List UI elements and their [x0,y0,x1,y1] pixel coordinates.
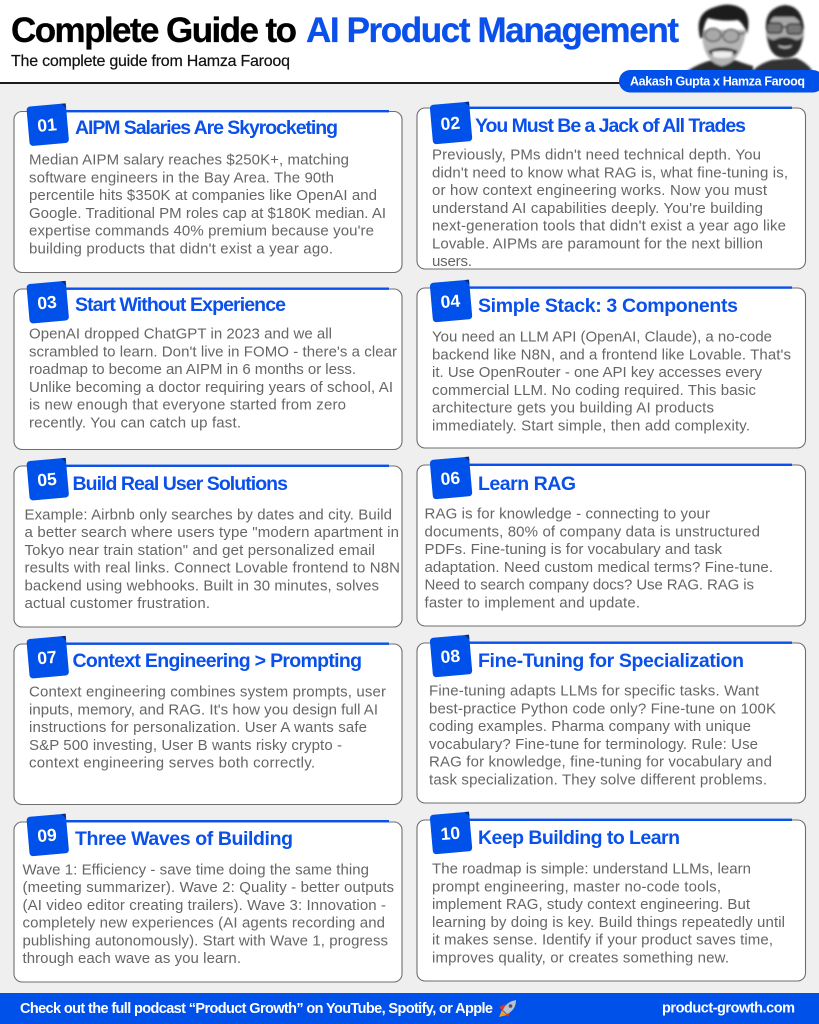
body 04: You need an LLM API (OpenAI, Claude), a no-code [432,329,772,346]
body 02: understand AI capabilities deeply. You're building [432,200,763,217]
panel: 10 Keep Building [417,812,806,981]
body 04: commercial LLM. No coding required. This basic [432,382,756,399]
heading 04: Simple Stack: 3 Components [478,295,738,317]
badge 02 [430,102,472,144]
body 08: task specialization. They solve different problems. [429,772,767,788]
body 06: PDFs. Fine-tuning is for vocabulary and task [424,541,722,558]
badge 01: 01 [36,114,58,136]
body 01: building products that didn't exist a year ago. [29,240,333,258]
badge 04 [430,280,472,322]
badge 05: 05 [36,469,58,490]
badge 06 [430,457,472,499]
heading 05: Build Real User Solutions [72,473,288,495]
body 01: Median AIPM salary reaches $250K+, matching [29,152,349,169]
heading 06: Learn RAG [478,473,576,495]
badge 06: 06 [440,468,461,489]
body 03: roadmap to become an AIPM in 6 months or less. [29,361,356,378]
body 05: Example: Airbnb only searches by dates and city. Build [24,506,392,524]
badge 04: 04 [440,291,461,312]
badge 01 [26,103,69,146]
heading 08: Fine-Tuning for Specialization [478,650,744,672]
body 06: adaptation. Need custom medical terms? Fine-tune. [424,559,773,576]
heading 09: Three Waves of Building [75,828,293,850]
body 01 [29,152,386,258]
body 02: didn't need to know what RAG is, what fine-tuning is, [432,164,788,182]
body 05: results with real links. Connect Lovable frontend to N8N [24,560,400,577]
body 05 [24,506,400,612]
badge 03 [26,281,69,324]
body 03: scrambled to learn. Don't live in FOMO - there's a clear [29,344,397,360]
heading 02: You Must Be a Jack of All Trades [475,115,746,137]
portraits of the two authors [687,5,812,72]
body 09 [22,862,394,967]
footer call to action: Check out the full podcast “Product Growth” on YouTube, Spotify, or Apple [20,1001,493,1017]
body 08: RAG for knowledge, fine-tuning for vocabulary and [429,754,772,771]
heading 07: Context Engineering > Prompting [72,650,362,672]
footer bar [0,993,819,1024]
body 03 [29,326,397,432]
body 05: actual customer frustration. [24,595,210,612]
header divider [0,82,625,84]
badge 08 [430,635,472,677]
body 03: OpenAI dropped ChatGPT in 2023 and we all [29,326,332,343]
name pill [619,70,819,92]
body 08: coding examples. Pharma company with unique [429,718,751,735]
body 06: faster to implement and update. [424,594,640,612]
body 09: publishing autonomously). Start with Wave 1, progress [22,932,388,950]
heading 01: AIPM Salaries Are Skyrocketing [75,117,338,139]
body 06: Need to search company docs? Use RAG. RAG is [424,577,754,594]
body 08: vocabulary? Fine-tune for terminology. Rule: Use [429,736,758,753]
title: AI Product Management [306,11,679,50]
body 05: Tokyo near train station" and get personalized email [24,542,375,559]
badge 07: 07 [36,647,58,668]
body 09: through each wave as you learn. [22,950,241,967]
body 02: or how context engineering works. Now you must [432,182,768,199]
body 05: a better search where users type "modern apartment in [24,524,399,541]
body 05: backend using webhooks. Built in 30 minutes, solves [24,578,379,594]
panel: 07 Context Engineering [14,636,402,804]
body 01: software engineers in the Bay Area. The 90th [29,170,334,186]
body 03: Unlike becoming a doctor requiring years of school, AI [29,379,393,396]
body 10: learning by doing is key. Build things repeatedly until [432,914,785,931]
body 02: Lovable. AIPMs are paramount for the next billion [432,236,763,252]
badge 09: 09 [36,825,58,846]
badge 05 [26,458,69,501]
body 06: RAG is for knowledge - connecting to your [424,506,710,523]
panel: 08 Fine-Tuning [417,635,806,803]
body 07: context engineering serves both correctly. [29,755,315,772]
body 08 [429,683,776,788]
icon: rocket [499,1000,516,1017]
body 07: inputs, memory, and RAG. It's how you design full AI [29,702,378,718]
body 10: The roadmap is simple: understand LLMs, learn [432,861,751,878]
body 04: architecture gets you building AI products [432,400,714,417]
header [0,0,819,92]
body 04 [432,329,791,434]
body 01: Google. Traditional PM roles cap at $180K median. AI [29,205,386,222]
body 08: best-practice Python code only? Fine-tune on 100K [429,700,776,718]
body 06 [424,506,773,612]
body 10: improves quality, or creates something new. [432,950,729,966]
body 10: implement RAG, study context engineering. But [432,896,751,913]
heading 03: Start Without Experience [75,294,286,316]
panel: 01 AIPM Salaries [14,103,402,273]
subtitle: The complete guide from Hamza Farooq [11,53,290,70]
panel: 05 Build Real User Solutions [14,458,402,627]
body 07 [29,684,386,772]
title: Complete Guide to [11,11,297,50]
name pill: Aakash Gupta x Hamza Farooq [630,74,805,88]
footer website: product-growth.com [662,1000,795,1016]
body 09: (AI video editor creating trailers). Wave 3: Innovation - [22,897,386,914]
body 01: expertise commands 40% premium because you're [29,223,374,240]
body 04: immediately. Start simple, then add complexity. [432,418,750,434]
body 03: is new enough that everyone started from zero [29,397,346,414]
body 02 [432,147,788,270]
body 09: completely new experiences (AI agents recording and [22,915,385,932]
body 06: documents, 80% of company data is unstructured [424,524,760,540]
panel: 06 Learn RAG [417,457,806,626]
body 02: Previously, PMs didn't need technical depth. You [432,147,761,164]
body 07: S&P 500 investing, User B wants risky crypto - [29,737,342,754]
body 04: backend like N8N, and a frontend like Lovable. That's [432,346,791,364]
body 02: users. [432,253,472,270]
badge 10 [430,812,472,854]
panel: 04 Simple Stack [417,280,806,448]
title [11,11,679,50]
badge 10: 10 [440,823,461,844]
panel: 03 Start Without Experience [14,281,402,450]
body 03: recently. You can catch up fast. [29,414,241,432]
body 10: it makes sense. Identify if your product saves time, [432,932,773,949]
badge 03: 03 [36,292,58,313]
badge 08: 08 [440,646,461,667]
body 01: percentile hits $350K at companies like OpenAI and [29,187,377,204]
heading 10: Keep Building to Learn [478,827,680,849]
body 08: Fine-tuning adapts LLMs for specific tasks. Want [429,683,760,700]
badge 09 [26,814,69,856]
badge 07 [26,636,69,679]
badge 02: 02 [440,113,461,134]
body 09: (meeting summarizer). Wave 2: Quality - better outputs [22,879,394,896]
body 10 [432,861,785,966]
body 04: it. Use OpenRouter - one API key accesses every [432,364,762,381]
panel: 09 Three Waves [14,814,402,982]
body 07: instructions for personalization. User A wants safe [29,719,367,736]
body 07: Context engineering combines system prompts, user [29,684,386,701]
panel: 02 Jack of All Trades [417,102,806,270]
body 09: Wave 1: Efficiency - save time doing the same thing [22,862,369,878]
body 10: prompt engineering, master no-code tools, [432,878,721,896]
body 02: next-generation tools that didn't exist a year ago like [432,218,786,235]
